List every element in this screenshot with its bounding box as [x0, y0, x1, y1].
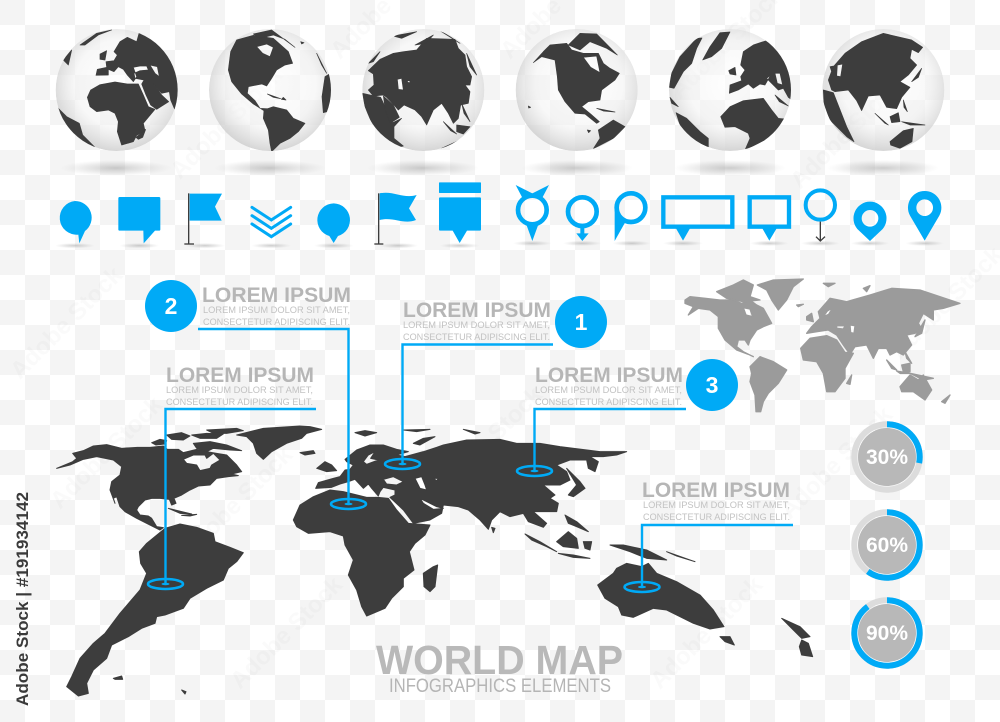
progress ring 90%: 90%	[866, 622, 908, 645]
progress ring 30%	[854, 424, 920, 490]
globe shadows	[60, 160, 939, 176]
right callout body: LOREM IPSUM DOLOR SIT AMET,	[643, 500, 790, 511]
stock watermarks: Adobe Stock	[225, 571, 348, 694]
callout 1 body: CONSECTETUR ADIPISCING ELIT.	[403, 332, 550, 343]
callout 3 heading: LOREM IPSUM	[535, 364, 683, 387]
Greenland and Iceland	[237, 426, 322, 459]
small map: Arctic islands	[717, 280, 760, 302]
icon: round speech bubble	[60, 201, 92, 243]
icon shadows	[55, 243, 480, 248]
progress ring 60%: 60%	[866, 534, 908, 557]
callout 1 heading: LOREM IPSUM	[403, 299, 551, 322]
Arctic islands	[152, 428, 243, 452]
icon: square speech bubble	[118, 197, 160, 243]
icon: outlined callout	[750, 197, 789, 241]
Tasmania and New Zealand	[720, 618, 813, 657]
icon shadows	[513, 241, 944, 246]
South America	[67, 524, 243, 696]
stock watermarks: Adobe Stock	[5, 261, 128, 384]
globes: Africa, Americas, Asia	[56, 29, 484, 152]
small map: Eurasia	[807, 288, 960, 358]
title: WORLD MAP	[376, 637, 623, 683]
Caribbean	[168, 508, 197, 516]
callout 3 leader line and marker	[517, 409, 686, 476]
stock watermarks: Adobe Stock	[175, 441, 298, 564]
callout 3 body: CONSECTETUR ADIPISCING ELIT.	[535, 397, 682, 408]
progress ring 90%	[854, 600, 920, 666]
callout left	[148, 364, 316, 589]
icon: banner marker	[439, 182, 481, 243]
right callout body: CONSECTETUR ADIPISCING ELIT.	[643, 512, 790, 523]
right callout body	[643, 500, 790, 523]
icon: ring with arrow	[568, 197, 597, 241]
stock watermarks: Adobe Stock	[165, 61, 288, 184]
number badge 3: 3	[706, 372, 718, 398]
right callout leader line and marker	[624, 525, 793, 592]
left callout body	[166, 385, 313, 408]
Africa	[293, 490, 430, 616]
globe: Asia	[362, 29, 484, 151]
Eurasia	[316, 439, 627, 529]
callout 1 body: LOREM IPSUM DOLOR SIT AMET,	[403, 320, 550, 331]
small map: South America	[750, 357, 787, 412]
right callout heading: LOREM IPSUM	[642, 479, 790, 502]
callout 3	[517, 359, 738, 476]
subtitle: INFOGRAPHICS ELEMENTS	[389, 676, 611, 697]
small map: Greenland and Iceland	[757, 279, 803, 310]
icon: round marker	[317, 203, 350, 243]
British Isles and northern islands	[317, 429, 480, 472]
stock watermarks: Adobe Stock	[785, 71, 908, 194]
small map: Africa	[801, 336, 853, 392]
callout 3 body: LOREM IPSUM DOLOR SIT AMET,	[535, 385, 682, 396]
icon: ring pin with tail	[615, 193, 645, 241]
New Guinea and Pacific islands	[610, 545, 695, 562]
number badge 1	[555, 296, 607, 348]
callout right	[624, 479, 793, 592]
icon: wide outlined callout	[663, 197, 732, 241]
stock watermarks: Adobe Stock	[775, 401, 898, 524]
left callout heading: LOREM IPSUM	[166, 364, 314, 387]
small map: Australia and New Zealand	[900, 375, 950, 403]
number badge 2: 2	[165, 293, 177, 319]
Japan, Philippines and Southeast Asia	[492, 468, 592, 558]
left callout body: LOREM IPSUM DOLOR SIT AMET,	[166, 385, 313, 396]
icon: ring with thin arrow	[806, 190, 835, 241]
globe: Americas	[209, 29, 333, 152]
Australia	[598, 563, 724, 629]
callout 2 body	[203, 305, 350, 328]
stock watermarks: Adobe Stock	[425, 381, 548, 504]
icon: waving flag	[374, 193, 417, 245]
icon: horned ring pin	[516, 185, 549, 241]
stock watermarks: Adobe Stock	[645, 571, 768, 694]
number badge 3	[686, 359, 738, 411]
Madagascar	[423, 565, 438, 592]
callout 2	[145, 280, 366, 509]
callout 2 body: LOREM IPSUM DOLOR SIT AMET,	[203, 305, 350, 316]
small map: North America	[685, 297, 772, 357]
number badge 1: 1	[575, 309, 588, 335]
icon: small map pin	[853, 202, 887, 241]
progress ring 30%: 30%	[866, 446, 908, 469]
globe: Africa and Europe	[56, 29, 190, 151]
progress ring 60%	[854, 512, 920, 578]
icon: flag on pole	[184, 193, 222, 245]
globe: Atlantic, Europe and Africa	[669, 29, 797, 151]
globes: North America, Atlantic, East Asia	[516, 29, 944, 151]
callout 2 leader line and marker	[198, 329, 366, 509]
vertical stock credit: Adobe Stock | #191934142	[13, 492, 32, 706]
icon: large map pin	[908, 191, 941, 241]
stock watermarks: Adobe Stock	[45, 391, 168, 514]
callout 1	[385, 296, 607, 469]
globe: North America	[516, 29, 638, 151]
main dark world map	[57, 426, 813, 696]
secondary grey world map	[685, 279, 960, 412]
callout 1 body	[403, 320, 550, 343]
callout 2 heading: LOREM IPSUM	[202, 284, 351, 307]
North America	[57, 445, 242, 530]
globe: East Asia and Australia	[822, 29, 944, 151]
callout 1 leader line and marker	[385, 344, 553, 469]
left callout leader line and marker	[148, 409, 316, 589]
callout 3 body	[535, 385, 682, 408]
left callout body: CONSECTETUR ADIPISCING ELIT.	[166, 397, 313, 408]
icon: triple chevrons	[252, 207, 291, 237]
icon row	[55, 182, 481, 248]
callout 2 body: CONSECTETUR ADIPISCING ELIT.	[203, 317, 350, 328]
small map: islands	[807, 283, 933, 384]
number badge 2	[145, 280, 197, 332]
